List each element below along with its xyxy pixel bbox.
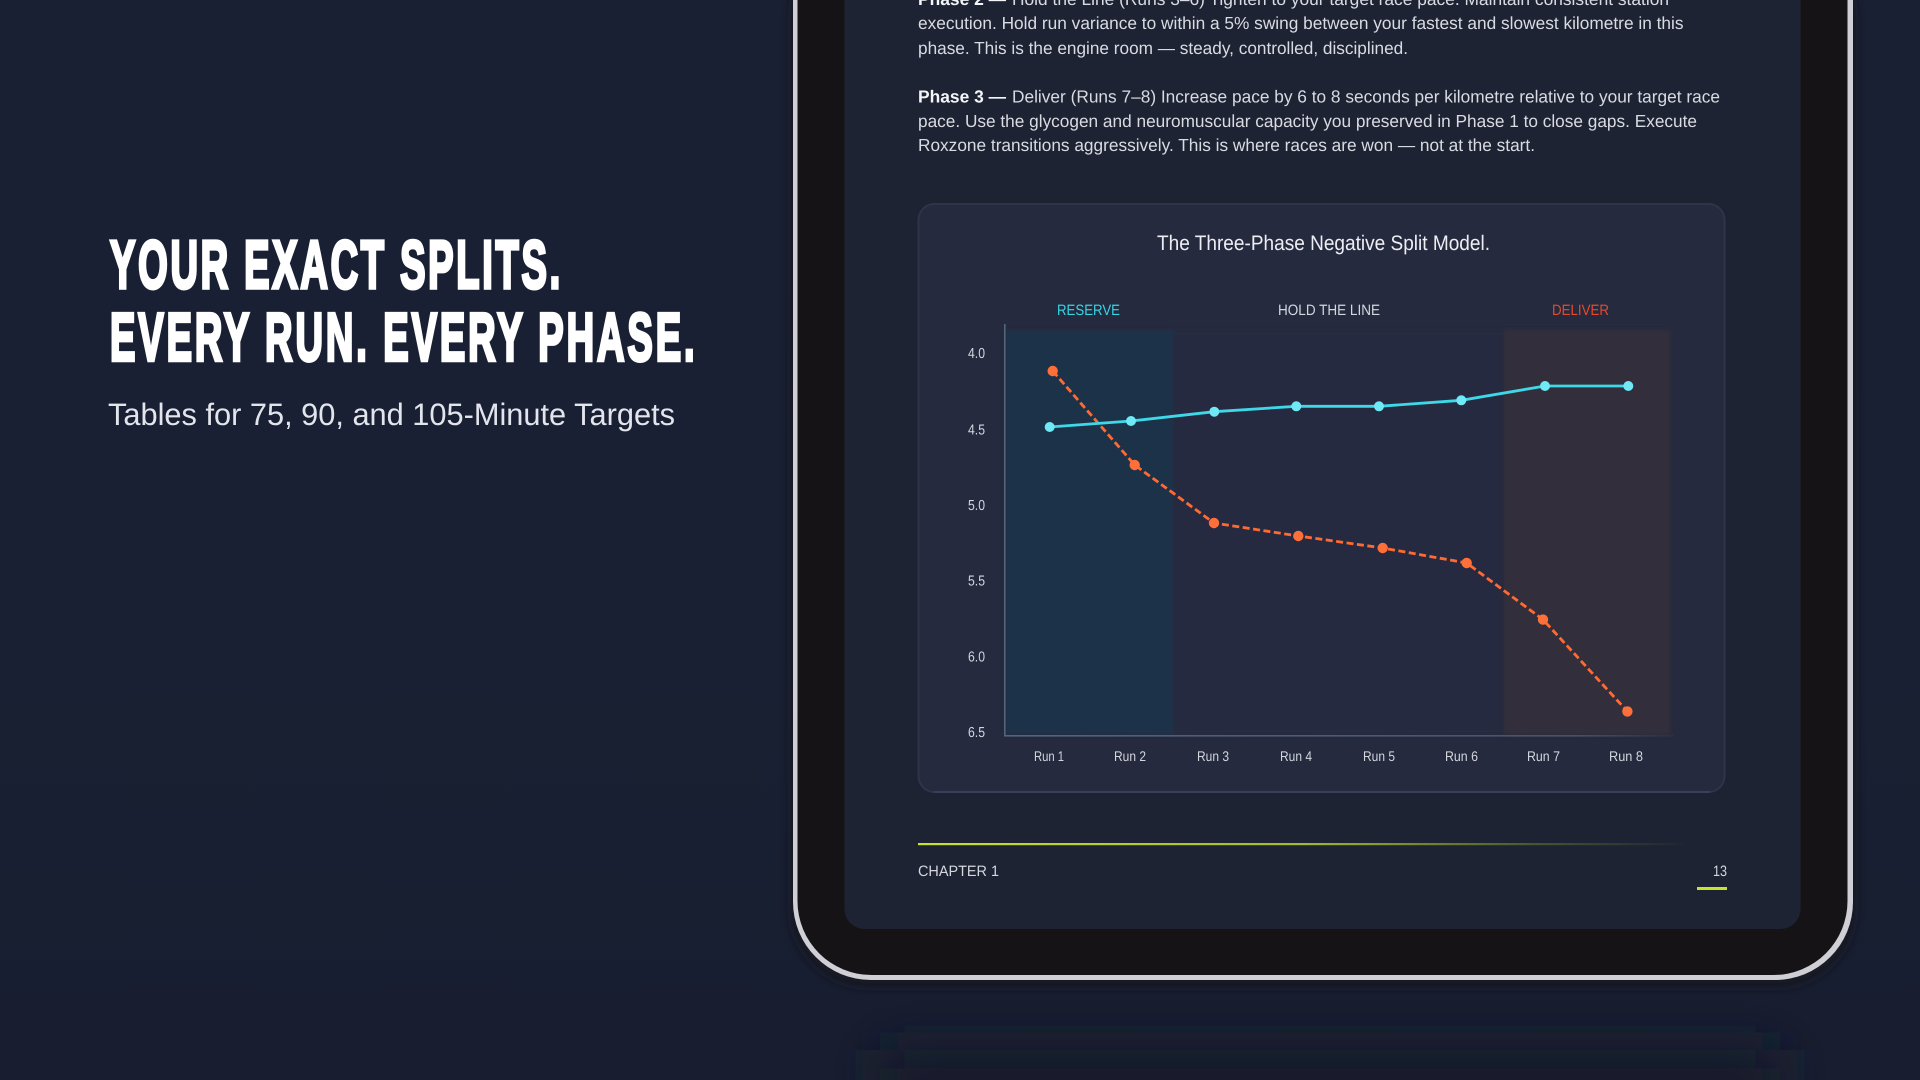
x axis labels: Run 6 (1445, 748, 1478, 764)
x axis labels (1034, 748, 1643, 764)
phase label: hold the line: HOLD THE LINE (1278, 302, 1380, 319)
phase bands (1005, 330, 1670, 735)
panel: chart card (918, 204, 1724, 792)
tablet (793, 0, 1853, 980)
x axis labels: Run 7 (1527, 748, 1560, 764)
heading (110, 227, 695, 376)
text block: phase 2 (918, 0, 1684, 58)
y axis labels: 6.0 (968, 650, 985, 666)
text block: phase 3: Phase 3 — (918, 86, 1006, 106)
axes (1004, 324, 1674, 737)
x axis labels: Run 1 (1034, 748, 1064, 764)
chart card bottom edge (934, 791, 1710, 793)
text block: phase 2: execution. Hold run variance to within a 5% swing between your fastest and slowest kilometre in this (918, 13, 1684, 33)
orange dashed line: positive split (1048, 366, 1633, 717)
y axis labels: 5.0 (968, 498, 985, 514)
phase label: reserve: RESERVE (1057, 302, 1120, 319)
chart title: The Three-Phase Negative Split Model. (1157, 232, 1490, 255)
cyan line: negative split (1045, 381, 1633, 432)
tablet frame: silver edge (793, 0, 1853, 980)
y axis labels: 5.5 (968, 574, 985, 590)
y axis labels: 4.0 (968, 346, 985, 362)
phase label: deliver: DELIVER (1552, 302, 1609, 319)
footer: page number: 13 (1713, 863, 1727, 880)
text block: phase 3 (918, 86, 1720, 155)
footer rule (918, 843, 1688, 845)
x axis labels: Run 3 (1197, 748, 1229, 764)
subtitle: Tables for 75, 90, and 105-Minute Targets (108, 397, 675, 432)
footer: chapter label: CHAPTER 1 (918, 863, 999, 880)
heading: YOUR EXACT SPLITS. (110, 227, 560, 303)
tablet shadow (791, 0, 1855, 1080)
x axis labels: Run 8 (1609, 748, 1643, 764)
tablet screen (844, 0, 1800, 929)
y axis labels: 4.5 (968, 422, 985, 438)
text block: phase 3: pace. Use the glycogen and neuromuscular capacity you preserved in Phase 1 to close gaps. Execute (918, 111, 1697, 131)
text block: phase 2: phase. This is the engine room — steady, controlled, disciplined. (918, 38, 1408, 58)
footer: page number underline (1697, 887, 1727, 890)
x axis labels: Run 2 (1114, 748, 1146, 764)
y axis labels (968, 346, 985, 741)
tablet bezel (798, 0, 1848, 975)
heading: EVERY RUN. EVERY PHASE. (110, 300, 695, 376)
text block: phase 3: Roxzone transitions aggressively. This is where races are won — not at the start. (918, 135, 1535, 155)
text block: phase 3: Deliver (Runs 7–8) Increase pace by 6 to 8 seconds per kilometre relative to your target race (1012, 86, 1720, 106)
x axis labels: Run 5 (1363, 748, 1395, 764)
x axis labels: Run 4 (1280, 748, 1312, 764)
y axis labels: 6.5 (968, 725, 985, 741)
